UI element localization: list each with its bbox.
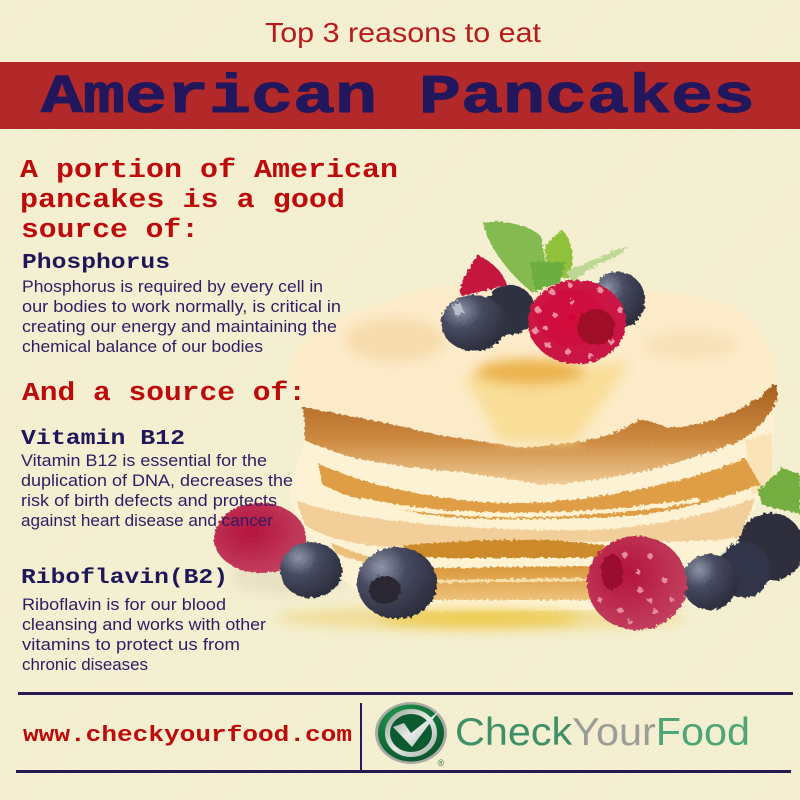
website address: www.checkyourfood.com: [23, 722, 352, 748]
Vitamin B12 description: [21, 452, 293, 530]
mint leaves: [483, 222, 627, 293]
Riboflavin description: Riboflavin is for our blood: [22, 596, 226, 614]
Vitamin B12 description: against heart disease and cancer: [21, 512, 274, 530]
Phosphorus description: our bodies to work normally, is critical in: [22, 298, 341, 316]
Phosphorus description: Phosphorus is required by every cell in: [22, 278, 323, 296]
Phosphorus description: [22, 278, 341, 356]
Phosphorus description: chemical balance of our bodies: [22, 338, 263, 356]
section heading: good source: source of:: [21, 216, 199, 245]
syrup plate shadow: [230, 562, 685, 630]
beige layer: [296, 498, 755, 547]
berries on top of the stack: [441, 255, 645, 364]
illustration: stack of pancakes with berries: [214, 222, 800, 630]
Vitamin B12 description: risk of birth defects and protects: [21, 492, 277, 510]
top pancake: [290, 285, 775, 448]
Vitamin B12 description: duplication of DNA, decreases the: [21, 472, 293, 490]
upper brown band: [303, 385, 777, 485]
section heading: good source: A portion of American: [20, 156, 398, 185]
title banner: American Pancakes: [41, 66, 755, 129]
logo icon: check mark badge: ®: [438, 758, 445, 768]
Riboflavin description: [22, 596, 267, 674]
pancake stack layers: [288, 285, 777, 612]
section heading: good source: [20, 156, 398, 245]
Vitamin B12 description: Vitamin B12 is essential for the: [21, 452, 267, 470]
Riboflavin description: chronic diseases: [22, 656, 148, 674]
Riboflavin description: cleansing and works with other: [22, 616, 267, 634]
Riboflavin description: vitamins to protect us from: [22, 636, 240, 654]
lowest orange layer: [425, 566, 595, 600]
section heading: a source: And a source of:: [22, 379, 306, 408]
berries at base, right: [587, 468, 800, 630]
logo icon: check mark badge: [375, 702, 447, 768]
middle orange band: [318, 458, 760, 519]
section heading: good source: pancakes is a good: [20, 186, 345, 215]
logo wordmark: CheckYourFood: [455, 711, 750, 754]
Phosphorus description: creating our energy and maintaining the: [22, 318, 337, 336]
nutrient heading: Riboflavin: Riboflavin(B2): [21, 566, 228, 590]
nutrient heading: Vitamin B12: Vitamin B12: [21, 427, 185, 451]
right side peach edge: [745, 432, 772, 495]
syrup on top pancake: [345, 318, 738, 626]
title banner: [0, 62, 800, 129]
berries at base, left: [214, 503, 437, 619]
nutrient heading: Phosphorus: Phosphorus: [22, 251, 170, 275]
top line heading: Top 3 reasons to eat: [265, 17, 541, 48]
